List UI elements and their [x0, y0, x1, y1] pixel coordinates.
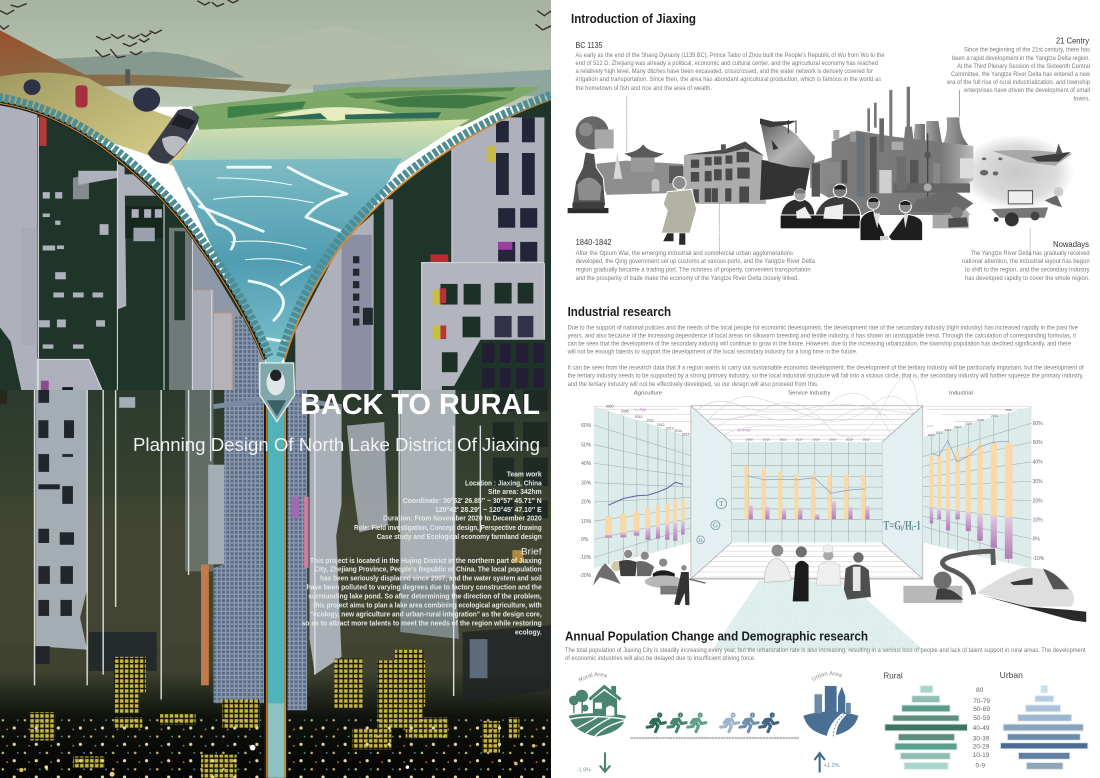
team work text block	[354, 472, 542, 541]
text block: industrial research: and the tertiary industry will not be effectively developed, so our design will also proceed from this.	[568, 382, 819, 388]
age labels	[973, 687, 990, 769]
age labels: 80	[976, 687, 984, 694]
team work text block: Site area: 342hm	[488, 489, 542, 496]
chart: service industry wall: 2015	[779, 437, 787, 441]
agriculture axis labels: 20%	[581, 500, 592, 506]
chart: industrial wall: 2014	[954, 425, 961, 429]
text block: 1840-1842: and the prosperity of trade make the economy of the Yangtze River Delta closely linked.	[576, 276, 799, 282]
right door panel	[882, 406, 923, 579]
lit windows at dusk	[30, 650, 519, 778]
chart: agriculture wall: 2014	[674, 429, 682, 433]
team work text block: Team work	[507, 472, 542, 478]
brief text block: surrounding lake pond. So after determining the direction of the problem,	[308, 594, 542, 601]
service workers group	[764, 545, 871, 601]
circled letters: T	[719, 501, 724, 508]
chart: service industry wall: 2017	[796, 437, 803, 441]
chart: industrial wall	[923, 406, 1045, 568]
brief text block: This project is located in the Hujing District in the northern part of Jiaxing	[310, 558, 542, 565]
brief heading: Brief	[521, 546, 542, 558]
team work text block: Case study and Ecological economy farmland design	[377, 534, 542, 541]
night lights	[0, 719, 555, 778]
chart: industrial wall: 2018	[977, 418, 984, 422]
arrow: rural down	[600, 752, 610, 772]
text block: industrial research: will not be enough talents to support the development of the local secondary industry for a long time in the future.	[567, 350, 858, 356]
water caustics	[189, 167, 347, 342]
chart: agriculture wall: Y₁=P/M	[634, 408, 646, 412]
zipper slider	[213, 363, 342, 422]
text block: Nowadays: The Yangtze River Delta has gradually received	[970, 251, 1090, 257]
chart: agriculture wall	[579, 405, 691, 579]
industrial axis labels: 0%	[1033, 536, 1040, 542]
zipper teeth right	[280, 93, 556, 359]
industrial axis labels: 40%	[1033, 460, 1043, 466]
text block: BC 1135: As early as the end of the Shang Dynasty (1135 BC), Prince Taibo of Zhou built the People's Republic of Wu from Wu to the	[576, 53, 885, 59]
birds	[0, 0, 553, 58]
timeline collage	[568, 87, 1074, 256]
text block: industrial research	[567, 326, 1084, 388]
text block: population	[565, 648, 1086, 662]
officials at desk	[781, 184, 861, 228]
text block: industrial research: years, and also because of the increasing dependence of local areas on silkworm breeding and textile industry, it has shown an unstoppable trend. Through the calculation of corresponding formulas, it	[568, 334, 1076, 340]
agriculture axis labels: 0%	[581, 537, 589, 543]
perspective chart room	[579, 377, 1086, 650]
text block: BC 1135	[576, 41, 885, 92]
heading: Annual Population Change and Demographic research: Annual Population Change and Demographic research	[565, 628, 868, 644]
text block: 21 Centry	[947, 36, 1091, 103]
colonial building	[684, 142, 766, 204]
text block: 1840-1842: After the Opium War, the emerging industrial and commercial urban agglomerations	[576, 251, 793, 257]
industrial axis labels: 50%	[1033, 440, 1043, 446]
city below the zipper	[0, 100, 555, 397]
text block: industrial research: Due to the support of national policies and the needs of the local people for economic development, the development rate of the secondary industry (light industry) has increased rapidly in the past five	[568, 326, 1079, 332]
agriculture axis labels: -10%	[579, 555, 592, 561]
boat	[148, 109, 199, 164]
age labels: 70-79	[973, 698, 990, 705]
text block: industrial research: the tertiary industry needs to be supported by a strong primary industry, so the local industrial structure will fall into a vicious circle, that is, the secondary industry will further squeeze the primary industry,	[568, 374, 1084, 380]
age labels: 20-29	[973, 744, 990, 751]
chart labels: Service Industry	[788, 390, 830, 396]
industrial axis labels: 20%	[1033, 498, 1043, 504]
chart: agriculture wall: 2010	[635, 415, 643, 419]
circled letters: G	[713, 523, 718, 530]
worker	[933, 207, 969, 228]
ceiling and floor lines	[594, 406, 1032, 579]
chart: service industry wall	[731, 429, 882, 543]
agriculture axis labels: 30%	[581, 480, 592, 486]
dark windows right	[493, 390, 548, 518]
industrial axis labels: -10%	[1033, 556, 1045, 562]
urban label: Urban	[1000, 671, 1023, 680]
chart: industrial wall: 2013	[944, 428, 951, 432]
team work text block: Role: Field investigation, Concept design, Perspective drawing	[354, 525, 542, 532]
age labels: 60-69	[973, 706, 990, 713]
chart: industrial wall: 2012	[936, 430, 943, 434]
chimneys	[867, 87, 913, 139]
text block: population: The total population of Jiaxing City is steadily increasing every year, but the urbanization rate is also increasing, resulting in a serious loss of people and lack of talent support in rural areas. The development	[565, 648, 1086, 654]
text block: 21 Centry: 21 Centry	[1056, 36, 1089, 46]
arrow: urban up	[814, 753, 825, 772]
chart: agriculture wall: 2005	[621, 410, 629, 414]
left door panel	[691, 406, 731, 579]
text block: 1840-1842: region gradually became a trading port. The richness of property, convenient transportation	[576, 268, 811, 274]
brief text block: this project aims to plan a lake area combining ecological agriculture, with	[313, 602, 542, 609]
age labels: 10-19	[973, 752, 990, 759]
text block: Nowadays: to shift to the region, and the secondary industry	[965, 268, 1090, 274]
farmers group	[593, 549, 705, 605]
text block: industrial research: It can be seen from the research data that if a region wants to carry out sustainable economic development, the development of the tertiary industry will be particularly important, but the development of	[568, 365, 1084, 371]
rural label: Rural	[883, 672, 903, 681]
left grey tower	[36, 390, 87, 650]
team work text block: 120°42′ 28.29″ ~ 120°45′ 47.10″ E	[435, 506, 542, 514]
cooling towers	[913, 117, 968, 145]
statue	[568, 152, 608, 213]
modern industry collage	[760, 87, 973, 241]
text block: BC 1135: end of 512 D. Zhejiang was already a political, economic and cultural center, and the agricultural economy has reached	[576, 61, 878, 67]
agriculture axis labels: 40%	[581, 461, 592, 467]
team work text block: Location : Jiaxing, China	[465, 480, 542, 488]
thin white verticals	[35, 390, 480, 700]
ship	[760, 118, 815, 200]
rural percentage: -1.9%	[577, 767, 591, 773]
chart: agriculture wall: 2012	[657, 423, 665, 427]
landscape and zipper scene	[0, 0, 556, 397]
right side buildings	[295, 213, 374, 390]
title: BACK TO RURAL	[300, 389, 540, 421]
urban skyline	[810, 118, 973, 215]
text block: 21 Centry: Since the beginning of the 21st century, there has	[964, 48, 1090, 54]
text block: 21 Centry: era of the full rise of rural industrialization, and township	[947, 80, 1091, 86]
age labels: 50-59	[973, 715, 990, 722]
text block: 1840-1842: developed, the Qing government set up customs at various ports, and the Yangtze River Delta	[576, 259, 816, 265]
circled letters	[697, 498, 727, 544]
age labels: 30-39	[973, 736, 990, 743]
brief text block: so as to attract more talents to meet the needs of the region while restoring	[302, 620, 542, 627]
early history collage	[568, 97, 1074, 256]
seated man	[661, 177, 697, 245]
team work text block: Coordinate: 30°52′ 26.85″ ~ 30°57′ 45.71″ N	[403, 497, 542, 505]
heading: Industrial research: Industrial research	[568, 304, 671, 319]
agriculture axis labels: 60%	[581, 423, 592, 429]
agriculture axis labels: 50%	[581, 442, 592, 448]
team work text block: Duration: From November 2020 to December 2020	[383, 516, 542, 522]
text block: Nowadays: has developed rapidly to cover the whole region.	[965, 276, 1090, 282]
age labels: 40-49	[973, 725, 990, 732]
brief text block: City, Zhejiang Province, People's Republic of China. The local population	[314, 567, 542, 574]
chart: service industry wall: 2020	[863, 437, 870, 441]
left windows	[39, 192, 109, 349]
chart: industrial wall: 2010	[928, 433, 935, 437]
central towers	[213, 390, 265, 703]
runners green	[647, 714, 706, 732]
industrial axis labels: 30%	[1033, 479, 1043, 485]
service bars	[745, 466, 865, 519]
industrial axis labels	[1033, 421, 1045, 562]
age labels: 0-9	[976, 762, 985, 769]
farmers on the land	[23, 69, 160, 112]
chart: industrial wall: 2020	[1005, 408, 1012, 412]
chart: industrial wall: y₁=Y	[927, 424, 933, 428]
text block: 21 Centry: Committee, the Yangtze River Delta has entered a new	[951, 72, 1091, 78]
brief text block: "ecology, new agriculture and urban-rural integration" as the design core,	[310, 612, 542, 619]
agriculture axis labels: 10%	[581, 519, 592, 525]
text block: BC 1135: BC 1135	[576, 41, 603, 50]
population diagrams	[568, 671, 1088, 774]
city lower half	[0, 390, 555, 778]
rural area arc label: Rural Area	[578, 672, 607, 682]
chevron line: >>>>>>>>>>>>>>>>>>>>>>>>>>>>>>>>>>>>>>>>>>>>>>>>>>>>>>>>>>>>	[630, 736, 799, 742]
chart: service industry wall: 2000	[746, 437, 753, 441]
circled letters: H	[699, 538, 703, 544]
chart: service industry wall: 2019	[829, 437, 837, 441]
handshake	[860, 197, 923, 241]
chart: agriculture wall: 2015	[682, 433, 690, 437]
chart: industrial wall: 2019	[991, 414, 998, 418]
subtitle: Planning Design Of North Lake District Of Jiaxing	[133, 435, 540, 455]
robot arm and train	[903, 551, 1086, 622]
urban percentage: +1.2%	[824, 763, 840, 769]
text block: Nowadays	[962, 240, 1090, 282]
text block: Nowadays: national attention, the industrial layout has begun	[962, 259, 1090, 265]
brief text block: have been polluted to varying degrees due to factory construction and the	[307, 584, 542, 591]
agriculture axis labels	[579, 423, 592, 579]
runners blue	[721, 714, 778, 732]
chart: industrial wall: 2016	[965, 421, 972, 425]
urban area arc label: Urban Area	[811, 671, 842, 680]
tractor	[991, 187, 1063, 226]
chart labels: Agriculture	[634, 390, 662, 396]
industrial bars	[930, 443, 1012, 517]
text block: Nowadays: Nowadays	[1053, 240, 1089, 249]
antenna line	[958, 90, 960, 117]
gate	[595, 144, 684, 195]
text block: industrial research: can be seen that the development of the secondary industry will continue to grow in the future. However, due to the increasing urbanization, the township population has declined significantly, and there	[568, 342, 1072, 348]
text block: 21 Centry: been a rapid development in the Yangtze Delta region.	[952, 56, 1090, 62]
zipper tape	[264, 390, 287, 778]
heading: Introduction of Jiaxing: Introduction of Jiaxing	[571, 11, 696, 26]
right grey blocks	[310, 404, 342, 675]
timeline leader lines	[627, 97, 1030, 256]
dotted floor path	[712, 581, 924, 650]
ceiling wave lines	[698, 377, 920, 437]
thin white verticals	[38, 117, 452, 390]
chart: agriculture wall: 2000	[606, 405, 613, 409]
chart labels: Industrial	[949, 390, 973, 396]
chart labels	[634, 390, 973, 396]
seal	[576, 116, 614, 150]
icon: urban city	[803, 686, 858, 736]
text block: 21 Centry: At the Third Plenary Session of the Sixteenth Central	[957, 64, 1090, 70]
brief text block: ecology.	[515, 629, 542, 636]
panel: poster cover	[0, 0, 556, 778]
text block: BC 1135: irrigation and transportation. Since then, the area has abundant agricultural production, which is famous in the world as	[576, 77, 881, 83]
chart: agriculture wall: 2013	[666, 426, 674, 430]
chart: service industry wall: 2018	[812, 437, 820, 441]
text block: 1840-1842	[576, 238, 816, 282]
text block: population: of economic industries will also be delayed due to insufficient driving force.	[565, 656, 756, 662]
text block: BC 1135: a relatively high level. Many ditches have been excavated, crisscrossed, and the water network is densely covered for	[576, 69, 873, 75]
text block: BC 1135: the hometown of fish and rice and the area of wealth.	[576, 86, 712, 92]
chart: service industry wall: 2019	[846, 437, 853, 441]
rural pyramid	[885, 686, 967, 769]
urban pyramid	[1000, 686, 1088, 769]
industrial axis labels: 10%	[1033, 518, 1043, 524]
text block: 21 Centry: enterprises have driven the development of small	[964, 88, 1090, 94]
icon: rural house	[569, 686, 626, 736]
formula: T=Gᵢ/Hᵢ-1	[883, 518, 921, 532]
chart: agriculture wall: 2011	[647, 419, 654, 423]
zipper teeth left	[0, 97, 269, 359]
chart: service industry wall: 2010	[763, 437, 770, 441]
industrial axis labels: 60%	[1033, 421, 1043, 427]
brief text block	[302, 558, 542, 636]
chart: service industry wall: X₁=P/M	[737, 429, 750, 433]
agriculture axis labels: -20%	[579, 573, 592, 579]
agriculture bars	[605, 499, 685, 535]
text block: 1840-1842: 1840-1842	[576, 238, 612, 247]
river with boat	[960, 135, 1074, 211]
brief text block: has been seriously displaced since 2007, and the water system and soil	[320, 576, 542, 583]
text block: 21 Centry: towns.	[1074, 97, 1090, 103]
